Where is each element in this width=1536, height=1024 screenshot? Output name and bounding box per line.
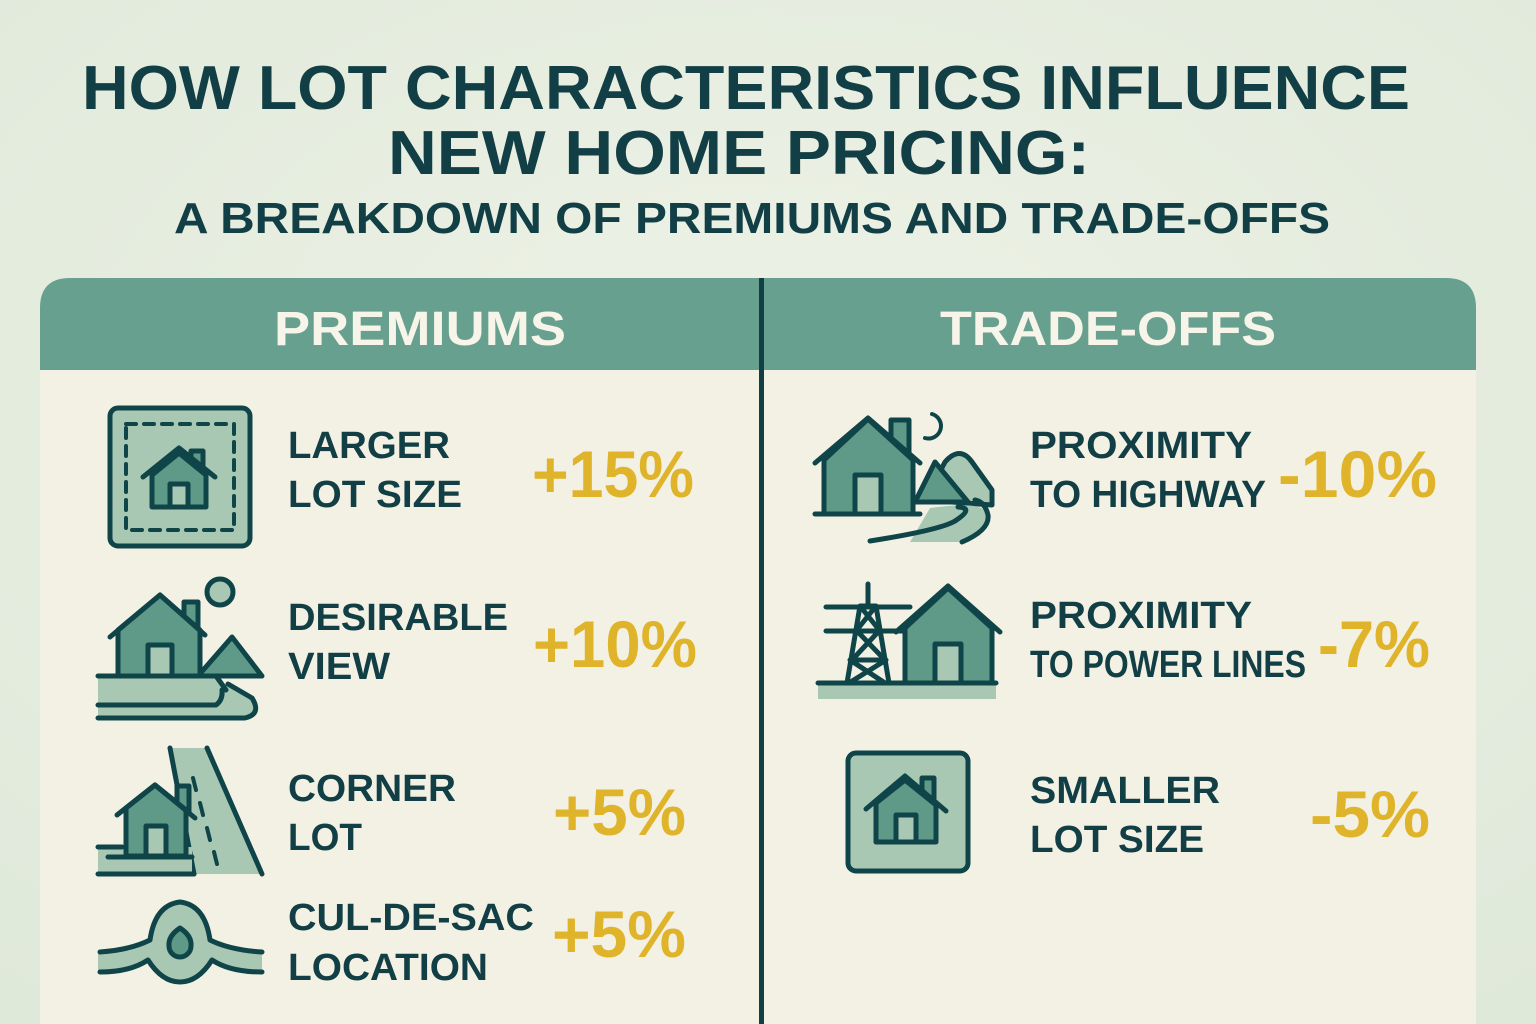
icon: larger lot	[110, 408, 250, 546]
icon: cul-de-sac	[98, 902, 262, 982]
title	[82, 54, 1410, 243]
text: larger lot size: LOT SIZE	[288, 474, 462, 516]
value: -7%: -7%	[1318, 607, 1430, 681]
text: proximity to highway: PROXIMITY	[1030, 425, 1252, 467]
text: cul-de-sac: CUL-DE-SAC	[288, 897, 534, 939]
text: proximity to highway: TO HIGHWAY	[1030, 474, 1266, 516]
panel: comparison table	[40, 278, 1476, 1024]
text: cul-de-sac: LOCATION	[288, 947, 488, 989]
heading: premiums: PREMIUMS	[274, 303, 566, 356]
text: desirable view: VIEW	[288, 646, 390, 688]
text: desirable view	[288, 597, 508, 688]
heading: trade-offs: TRADE-OFFS	[940, 303, 1276, 356]
text: proximity to power lines: TO POWER LINES	[1030, 644, 1306, 686]
value: +5% corner: +5%	[553, 775, 686, 849]
title: NEW HOME PRICING:	[388, 119, 1090, 188]
text: proximity to power lines: PROXIMITY	[1030, 595, 1252, 637]
text: corner lot	[288, 768, 456, 859]
text: smaller lot size: LOT SIZE	[1030, 819, 1204, 861]
text: proximity to power lines	[1030, 595, 1306, 686]
icon: highway	[815, 414, 992, 542]
value: +5% cul-de-sac: +5%	[552, 897, 686, 971]
text: smaller lot size: SMALLER	[1030, 770, 1220, 812]
text: corner lot: LOT	[288, 817, 362, 859]
icon: corner lot	[98, 748, 262, 874]
text: desirable view: DESIRABLE	[288, 597, 508, 639]
text: cul-de-sac	[288, 897, 534, 989]
icon: smaller lot	[848, 753, 968, 871]
value: -10%: -10%	[1278, 437, 1437, 511]
text: smaller lot size	[1030, 770, 1220, 861]
value: +15%: +15%	[532, 437, 694, 511]
value: -5%: -5%	[1310, 777, 1430, 851]
icon: power lines	[818, 584, 1000, 699]
icon: desirable view	[98, 579, 262, 718]
value: +10%: +10%	[533, 607, 697, 681]
text: proximity to highway	[1030, 425, 1266, 516]
text: larger lot size	[288, 425, 462, 516]
title: HOW LOT CHARACTERISTICS INFLUENCE	[82, 54, 1410, 123]
text: larger lot size: LARGER	[288, 425, 450, 467]
text: corner lot: CORNER	[288, 768, 456, 810]
title: A BREAKDOWN OF PREMIUMS AND TRADE-OFFS	[174, 194, 1330, 243]
